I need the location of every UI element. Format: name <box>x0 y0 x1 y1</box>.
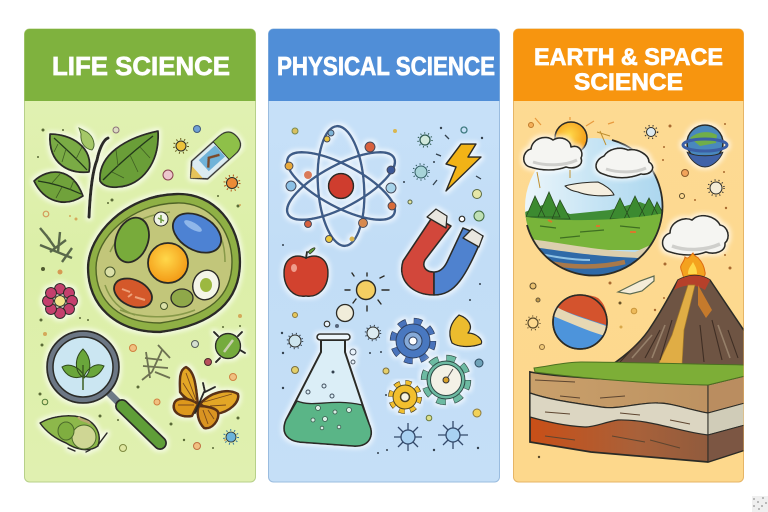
icon: earth cross section layers <box>530 362 745 462</box>
icon: glowing sun bulb <box>345 273 389 311</box>
organelle: blue vacuole <box>166 205 228 261</box>
scene: volcano and earth cross section <box>530 253 745 462</box>
icon: pink flower <box>42 284 78 318</box>
icon: flask with green liquid <box>284 334 371 446</box>
icon: magnifying glass with leaf <box>47 331 160 443</box>
icon: stick insect sketch <box>142 345 170 380</box>
panel: physical science <box>268 29 500 482</box>
icon: blue gear <box>394 322 432 360</box>
icon: sun <box>555 122 587 154</box>
heading: life science: LIFE SCIENCE <box>52 51 230 81</box>
icon: striped planet <box>553 295 607 349</box>
icon: teal clock gear <box>425 359 467 401</box>
speckles: physical science <box>281 127 484 454</box>
icon: horseshoe magnet <box>402 209 483 295</box>
icon: yellow gear <box>392 384 418 410</box>
organelle: small green body <box>171 289 193 307</box>
icon: capsule organism <box>183 128 245 187</box>
icon: sketched plant specimen <box>40 228 72 262</box>
heading: earth and space science <box>534 44 723 96</box>
icon: butterfly <box>174 367 238 428</box>
icon: radial spark left <box>394 423 422 451</box>
icon: rising bubbles <box>324 304 354 328</box>
icon: sketched rocket <box>618 276 654 294</box>
header: earth and space science <box>514 29 744 101</box>
icon: yellow moth shape <box>450 315 482 347</box>
speckles: earth and space <box>526 117 732 458</box>
icon: flat cloud <box>565 182 614 196</box>
icon: lightning bolt <box>446 144 481 191</box>
speckles: life science <box>37 126 242 452</box>
icon: earth globe cutaway <box>525 138 664 276</box>
icon: radial spark right <box>438 421 468 449</box>
heading: physical science: PHYSICAL SCIENCE <box>277 51 495 81</box>
icon: red apple <box>284 248 328 296</box>
icon: plant cell <box>88 194 240 332</box>
header: life science <box>24 29 256 101</box>
icon: leaf sprig <box>34 128 158 217</box>
icon: cloud left <box>524 137 582 170</box>
panel: earth and space science <box>514 29 745 482</box>
icon: ringed planet <box>683 125 727 167</box>
icon: atom <box>278 125 404 247</box>
hills <box>525 202 665 235</box>
icon: cloud centre <box>596 148 653 178</box>
organelle: white vesicle <box>189 266 223 304</box>
organelle: chloroplast <box>109 213 155 267</box>
icon: green larva <box>40 416 107 452</box>
icon: volcano <box>614 252 744 364</box>
grass top <box>534 362 745 385</box>
organelle: nucleus <box>148 243 188 283</box>
icon: green beetle <box>214 332 245 362</box>
header: physical science <box>268 29 500 101</box>
organelle: red mitochondrion <box>109 273 157 313</box>
heading: earth and space science: EARTH & SPACE <box>534 44 723 71</box>
panel: life science <box>24 29 256 482</box>
icon: cloud above volcano <box>662 216 728 255</box>
atom nucleus <box>328 174 354 198</box>
organelle: top vesicle <box>154 212 168 226</box>
decorative: noise square corner mark <box>752 496 768 512</box>
heading: earth and space science: SCIENCE <box>574 69 683 96</box>
